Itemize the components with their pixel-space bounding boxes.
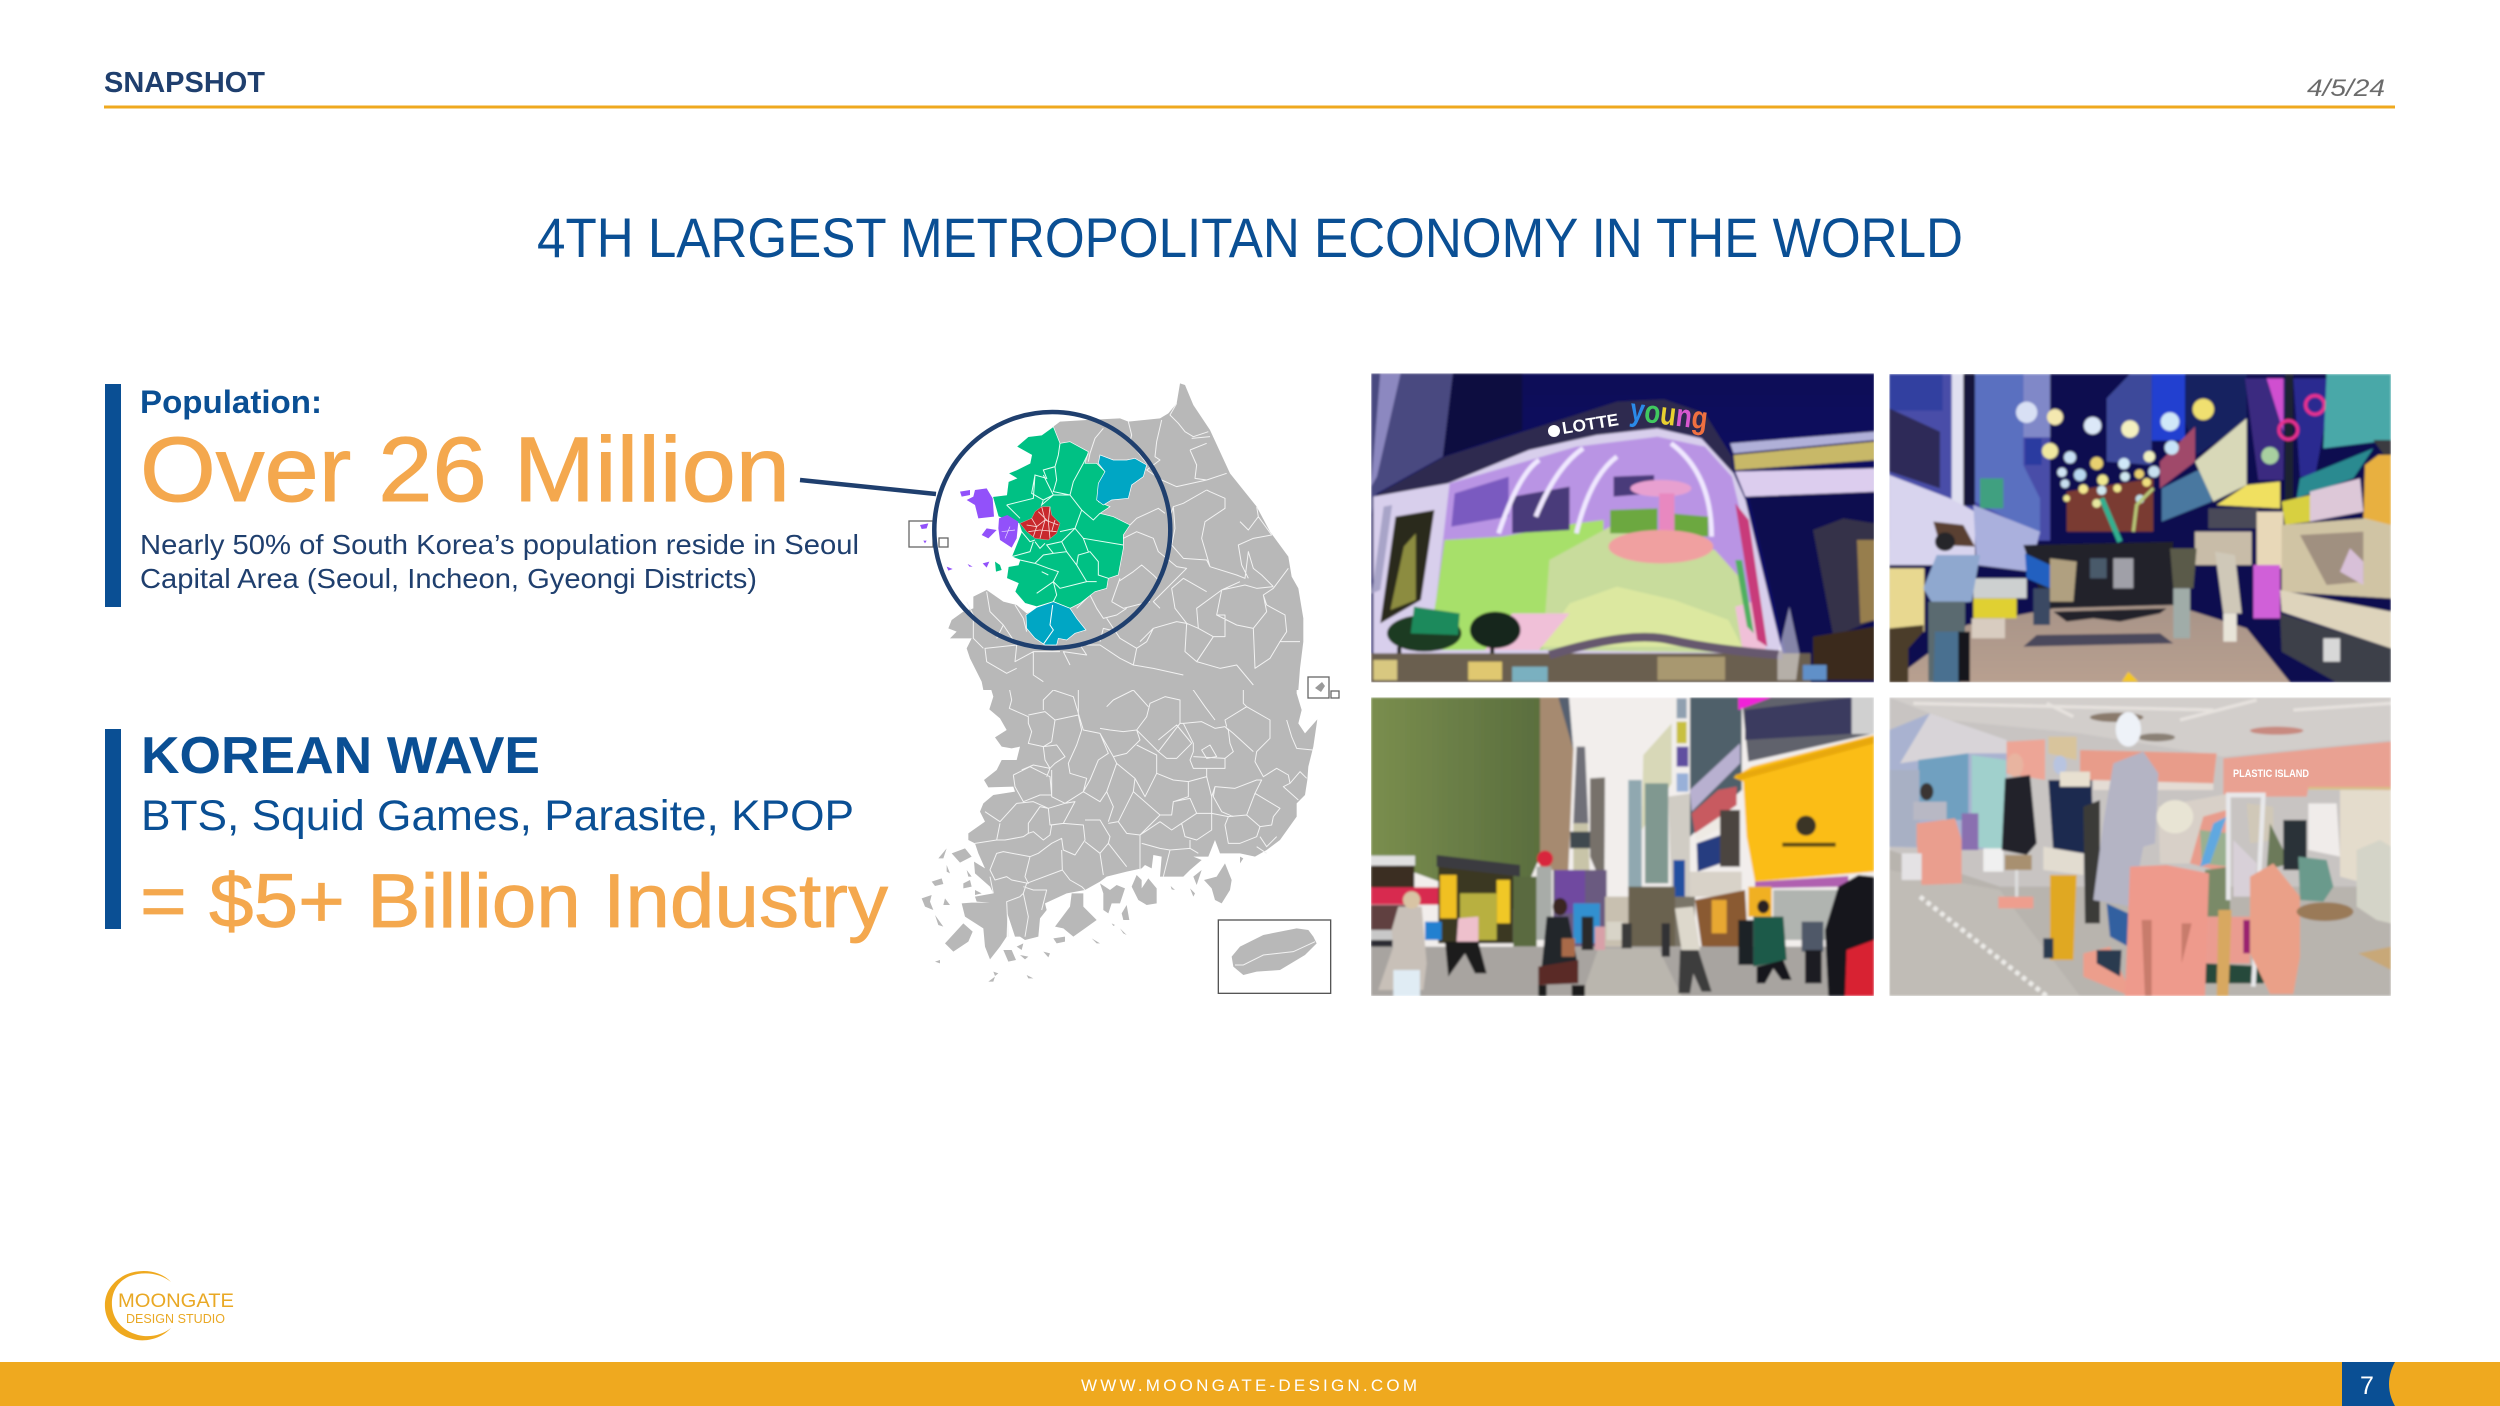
population label: Population: — [140, 384, 322, 420]
map south half — [922, 677, 1331, 993]
photo sign: plastic island: PLASTIC ISLAND — [2233, 768, 2309, 780]
incheon islands — [920, 488, 1018, 571]
footer bar — [0, 1362, 2500, 1406]
population description: Capital Area (Seoul, Incheon, Gyeongi Districts) — [140, 563, 757, 594]
connector line — [800, 480, 936, 494]
footer url: WWW.MOONGATE-DESIGN.COM — [1081, 1376, 1417, 1395]
photo sign: lotte young: LOTTE — [1561, 410, 1620, 438]
north district boundaries — [967, 403, 1300, 685]
north-east blue county — [1097, 455, 1147, 505]
panel: korean wave — [105, 727, 888, 944]
photo: myeongdong shopping street by day — [1371, 697, 1874, 996]
page number: 7 — [2360, 1372, 2374, 1400]
photo sign: lotte young: young — [1628, 391, 1710, 436]
korean wave accent bar — [105, 729, 121, 929]
photo: lotte young plaza at night — [1371, 373, 1875, 682]
section label: snapshot: SNAPSHOT — [104, 67, 265, 99]
map north half — [920, 383, 1303, 690]
date: 4/5/24 — [2307, 75, 2385, 102]
population description: Nearly 50% of South Korea’s population reside in Seoul — [140, 529, 859, 560]
population accent bar — [105, 384, 121, 607]
island inset boxes — [909, 521, 1339, 698]
photo: clothing store interior — [1889, 697, 2391, 996]
ulleung island — [1315, 682, 1325, 692]
magnifier circle — [934, 412, 1170, 648]
map: south korea — [909, 383, 1339, 993]
south blue counties — [1026, 602, 1086, 645]
title: 4TH LARGEST METROPOLITAN ECONOMY IN THE WORLD — [537, 206, 1963, 269]
logo: moongate design studio — [105, 1271, 234, 1340]
photo sign: lotte young — [1548, 391, 1710, 438]
logo wordmark: MOONGATE — [118, 1291, 234, 1312]
gyeonggi districts — [993, 427, 1130, 608]
logo crescent — [105, 1271, 171, 1340]
photo: myeongdong street stalls at night — [1889, 374, 2391, 682]
jeju island — [1232, 928, 1317, 975]
jeju inset box — [1218, 920, 1331, 993]
population description — [140, 529, 859, 594]
south district boundaries — [975, 680, 1313, 937]
seoul — [1020, 507, 1060, 540]
panel: population — [105, 384, 859, 607]
logo tagline: DESIGN STUDIO — [126, 1312, 225, 1326]
page number tab — [2342, 1362, 2395, 1406]
industry value: = $5+ Billion Industry — [140, 859, 888, 944]
korean wave examples: BTS, Squid Games, Parasite, KPOP — [141, 792, 854, 840]
south coast islands — [922, 848, 1243, 982]
population figure: Over 26 Million — [140, 419, 790, 521]
korean wave heading: KOREAN WAVE — [141, 727, 540, 785]
